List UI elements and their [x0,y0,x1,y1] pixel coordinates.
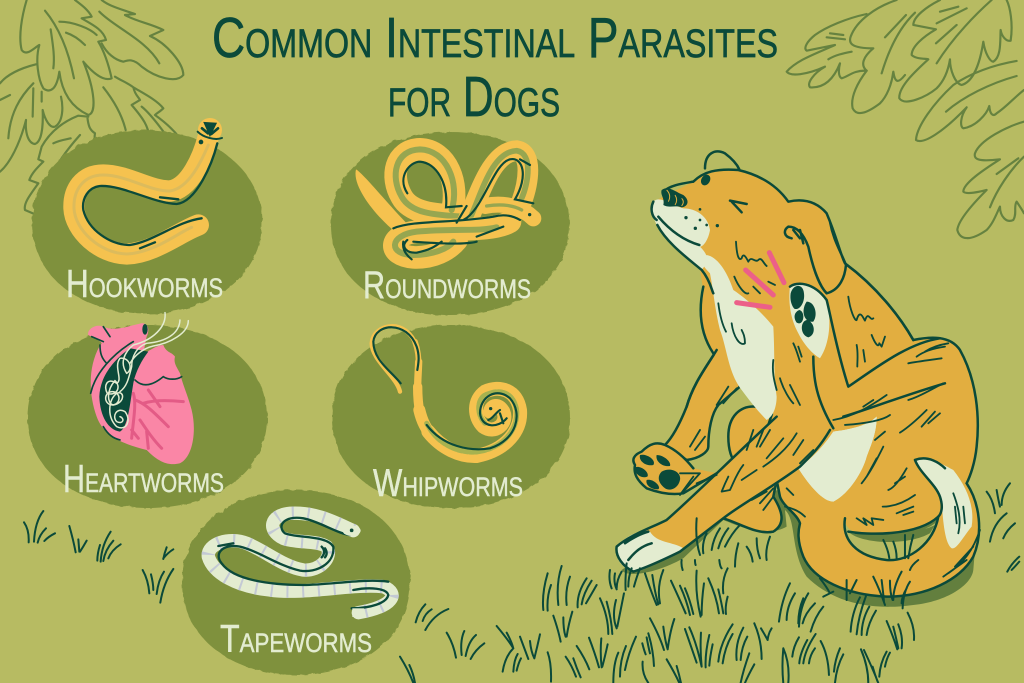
white toes [616,531,683,573]
ground shadow [622,463,977,607]
label: Whipworms [373,462,523,505]
title [212,6,778,129]
muzzle [652,199,710,270]
raised paw [789,284,829,358]
label: Hookworms [66,263,223,306]
hookworm illustration [74,118,222,254]
nose [661,188,688,207]
chest [703,255,777,420]
grass near dog and right side [696,483,1019,572]
panel: whipworms [332,325,570,508]
title: for Dogs [388,65,560,129]
title: Common Intestinal Parasites [212,6,778,70]
white belly overlay [798,417,877,502]
fur lines [680,242,980,577]
heart illustration [88,313,194,464]
label: Tapeworms [220,618,372,661]
tapeworm illustration [208,513,392,617]
big front leg outline [617,417,830,572]
gap between tail and body [845,517,938,560]
hind leg and head mass [617,170,853,572]
whipworm illustration [372,326,520,456]
label: Heartworms [63,458,224,501]
panel: roundworms [331,132,569,315]
outlines [652,151,913,340]
white belly [798,417,877,502]
rear paw pads [635,455,680,490]
rear thigh behind front leg [723,406,787,532]
neck fur edge [687,287,717,407]
grass: left tufts [24,511,173,603]
panel: tapeworms [182,490,410,675]
face features [684,173,747,230]
leaves: top left [0,0,185,215]
leaves: top right [787,0,1024,238]
white tail tip [915,459,972,548]
grass: bottom field [400,560,918,683]
panel: heartworms [28,313,267,508]
label: Roundworms [363,264,531,307]
far paw base [633,443,717,494]
scratch marks [737,253,784,307]
far front leg [665,350,740,460]
panel: hookworms [32,118,262,314]
illustration: dog scratching [616,151,1019,607]
roundworm illustration [356,149,533,259]
body and tail [767,263,979,597]
